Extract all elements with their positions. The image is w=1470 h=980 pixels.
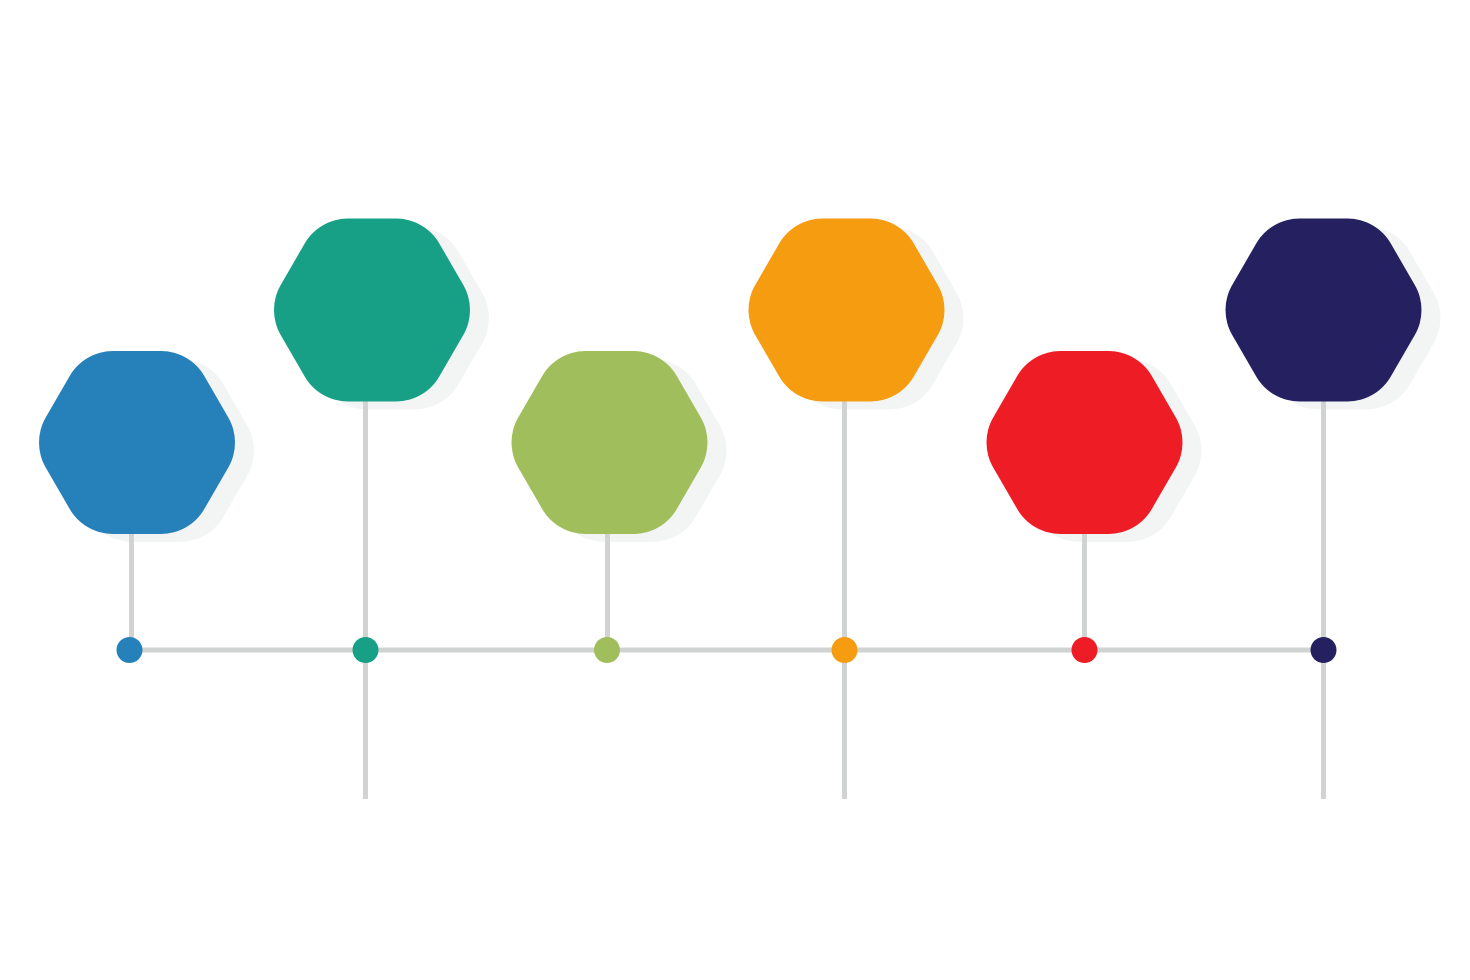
timeline dot: red (1072, 637, 1098, 663)
timeline dot: green (594, 637, 620, 663)
step 1: blue hexagon (39, 351, 235, 534)
step 4: orange hexagon (749, 218, 944, 402)
timeline dot: orange (832, 637, 858, 663)
connector stems (129, 398, 1326, 799)
timeline dot: teal (352, 637, 378, 663)
hexagon drop shadows (58, 226, 1440, 542)
horizontal timeline axis (130, 648, 1323, 652)
timeline dot: navy (1310, 637, 1336, 663)
step 3: green hexagon (512, 351, 707, 534)
step 5: red hexagon (987, 351, 1182, 534)
step 6: navy hexagon (1226, 218, 1421, 402)
timeline dot: blue (116, 637, 142, 663)
step 2: teal hexagon (274, 218, 470, 402)
